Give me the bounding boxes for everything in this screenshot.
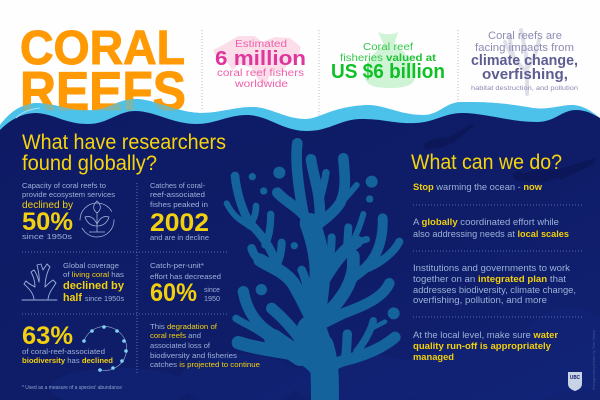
wave overlay — [0, 99, 600, 140]
stat: 50%: 50% — [22, 208, 73, 236]
stat: value: fisheries valued at — [340, 52, 437, 64]
heading: researchers — [22, 131, 226, 175]
dark ocean panel — [0, 110, 600, 400]
action: water quality: managed — [413, 352, 454, 363]
stat: 63%: 63% — [22, 322, 73, 350]
stat: impacts: climate change, — [471, 53, 578, 69]
stat: fishers: 6 million — [215, 48, 306, 70]
text: projected degradation: This degradation of — [150, 322, 218, 331]
wave highlight — [16, 108, 40, 118]
icon: grey coral — [505, 30, 539, 94]
top dividers — [202, 30, 458, 116]
action: integrated plan: overfishing, pollution, and more — [413, 295, 547, 306]
stat: 63%: biodiversity has declined — [22, 356, 113, 365]
stat: 2002: Catches of coral- — [150, 181, 205, 190]
title: CORAL — [20, 22, 185, 75]
stat: 50% — [22, 181, 115, 241]
stat: 2002: reef-associated — [150, 190, 205, 199]
diver right — [513, 158, 596, 184]
reef texture — [50, 308, 600, 400]
stat: half: of living coral has — [63, 270, 124, 279]
icon: dotted ring — [82, 325, 128, 372]
title — [20, 22, 186, 122]
action: integrated plan — [413, 263, 576, 306]
stat: 60%: effort has decreased — [150, 272, 221, 281]
stat: 50%: since 1950s — [22, 232, 72, 241]
stat: 2002: 2002 — [150, 209, 209, 237]
text: projected degradation — [150, 322, 260, 369]
logo: UBC shield: UBC — [570, 375, 580, 381]
coral illustration — [227, 143, 400, 400]
stat: value: Coral reef — [363, 41, 413, 53]
stat: 2002: and are in decline — [150, 233, 209, 242]
stat: half — [63, 261, 125, 304]
action: stop warming: Stop warming the ocean - now — [413, 182, 543, 193]
stat: half: half since 1950s — [63, 292, 124, 304]
heading: researchers: What have researchers — [22, 131, 226, 154]
stat: 2002 — [150, 181, 209, 242]
logo: UBC shield — [568, 372, 582, 391]
stat: 50%: Capacity of coral reefs to — [22, 181, 106, 190]
action: global effort: also addressing needs at local scales — [413, 229, 569, 240]
stat: fishers — [213, 36, 306, 90]
stat: 63% — [22, 322, 113, 365]
icon: coral outline — [22, 264, 57, 300]
light blue wave — [0, 99, 600, 140]
heading: what can we do: What can we do? — [411, 151, 562, 174]
stat: 50%: provide ecosystem services — [22, 190, 115, 199]
heading: researchers: found globally? — [22, 152, 157, 175]
stat: 60%: 60% — [150, 279, 197, 307]
stat: impacts — [471, 30, 578, 94]
action: water quality — [413, 330, 558, 363]
footnote: * Used as a measure of a species' abundance — [22, 385, 122, 391]
stat: 60%: 1950 — [204, 294, 220, 303]
stat: value — [331, 32, 445, 88]
text: projected degradation: associated loss of — [150, 341, 211, 350]
stat: fishers: Estimated — [235, 39, 287, 50]
stat: 60%: since — [204, 285, 220, 294]
grid dividers — [22, 183, 582, 375]
action: water quality: At the local level, make sure water — [413, 330, 558, 341]
photo credit: Background picture by Tom Sisley — [591, 330, 596, 390]
stat: 60% — [150, 261, 221, 307]
title: REEFS — [20, 60, 186, 122]
stat: 63%: of coral-reef-associated — [22, 347, 105, 356]
stat: 50%: declined by — [22, 200, 73, 211]
action: integrated plan: Institutions and governments to work — [413, 263, 570, 274]
action: global effort: A globally coordinated effort while — [413, 217, 559, 228]
stat: value: US $6 billion — [331, 61, 445, 83]
action: integrated plan: together on an integrated plan that — [413, 274, 566, 285]
icon: world map — [213, 36, 301, 84]
stat: 2002: fishes peaked in — [150, 200, 208, 209]
stat: impacts: facing impacts from — [475, 42, 574, 54]
stat: fishers: worldwide — [234, 79, 289, 90]
stat: impacts: Coral reefs are — [488, 30, 562, 42]
action: integrated plan: addresses biodiversity, climate change, — [413, 285, 576, 296]
text: projected degradation: catches is projected to continue — [150, 360, 260, 369]
stat: fishers: coral reef fishers — [217, 68, 304, 79]
stat: half: Global coverage — [63, 261, 119, 270]
diver left — [423, 123, 474, 151]
stat: half: declined by — [63, 280, 125, 292]
stat: impacts: habitat destruction, and pollution — [471, 85, 578, 92]
icon: plant in circle — [80, 201, 114, 237]
text: projected degradation: coral reefs and — [150, 331, 201, 340]
action: global effort — [413, 217, 569, 240]
action: water quality: quality run-off is appropriately — [413, 341, 552, 352]
stat: impacts: overfishing, — [482, 67, 568, 83]
text: projected degradation: biodiversity and fisheries — [150, 351, 237, 360]
stat: 60%: Catch-per-unit* — [150, 261, 204, 270]
icon: money bag — [365, 32, 415, 88]
